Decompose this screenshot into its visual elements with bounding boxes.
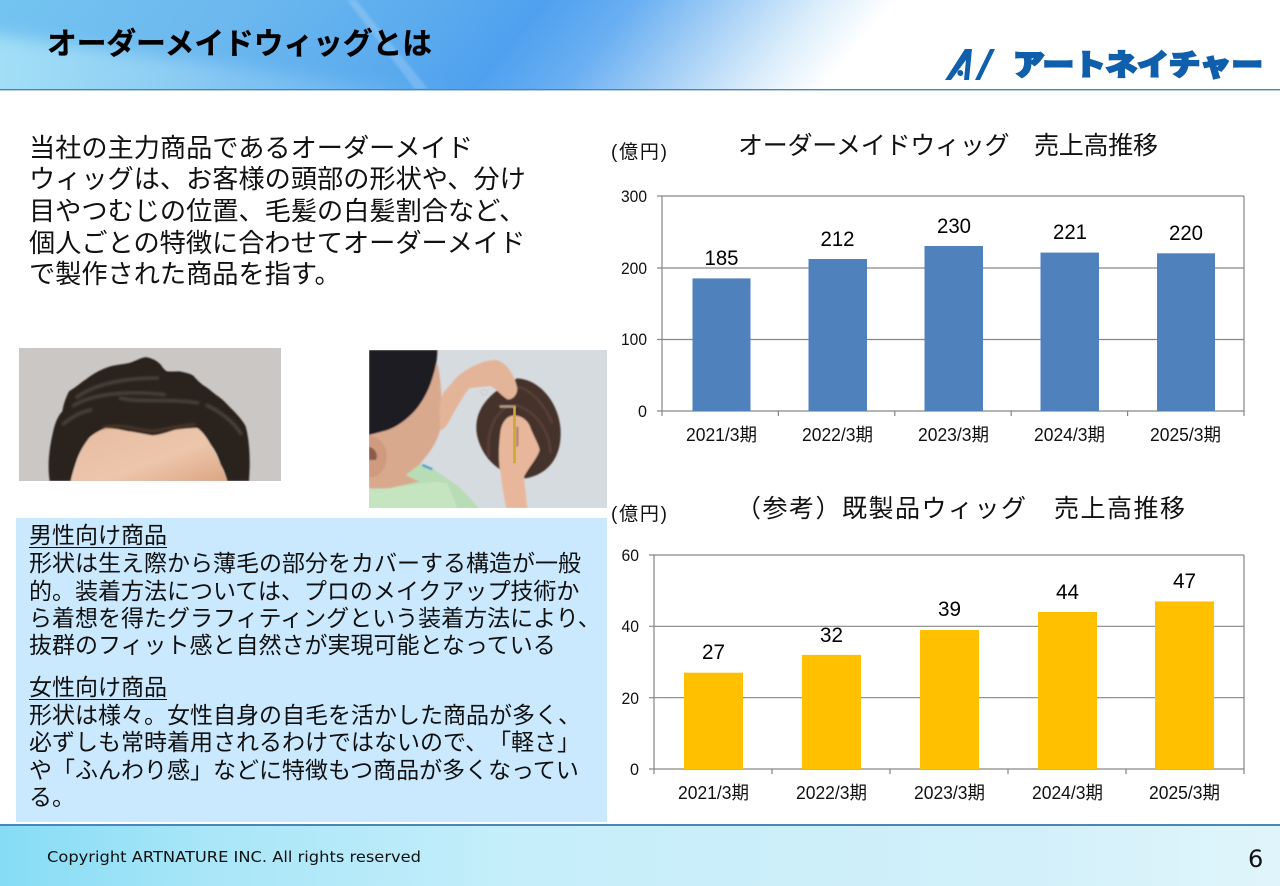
bar chart: ready-made wig sales: 47 xyxy=(1173,570,1196,593)
face and neck xyxy=(369,363,442,488)
bar chart: ready-made wig sales: 40 xyxy=(622,617,639,636)
bar chart: made-to-order wig sales: 2025/3期 xyxy=(1150,425,1221,445)
bar chart: ready-made wig sales: 60 xyxy=(622,546,639,565)
page number: 6 xyxy=(1248,845,1263,873)
text block: men's products: 形状は生え際から薄毛の部分をカバーする構造が一般 xyxy=(29,550,581,576)
heading: women's products: 女性向け商品 xyxy=(29,674,167,700)
bar chart: ready-made wig sales: 27 xyxy=(702,641,725,664)
unit label: (億円) xyxy=(611,141,667,163)
text block: women's products: 形状は様々。女性自身の自毛を活かした商品が多く、 xyxy=(29,702,581,728)
header band xyxy=(0,0,1280,90)
bar chart: made-to-order wig sales: 221 xyxy=(1053,221,1087,244)
text block: women's products: 必ずしも常時着用されるわけではないので、「軽さ」 xyxy=(29,729,580,755)
intro text: 個人ごとの特徴に合わせてオーダーメイド xyxy=(29,228,525,258)
panel: product descriptions xyxy=(16,518,607,822)
bar chart: made-to-order wig sales: 2021/3期 xyxy=(686,425,757,445)
chart title: made-to-order: オーダーメイドウィッグ 売上高推移 xyxy=(738,132,1158,160)
logo mark xyxy=(945,49,995,80)
footer band xyxy=(0,824,1280,886)
shirt xyxy=(369,463,479,508)
text block: women's products xyxy=(29,702,581,810)
pencil xyxy=(513,407,516,463)
bar chart: made-to-order wig sales: 2022/3期 xyxy=(802,425,873,445)
bar chart: ready-made wig sales: 0 xyxy=(630,760,639,779)
bar chart: ready-made wig sales: 2024/3期 xyxy=(1032,783,1103,803)
wig head xyxy=(476,378,561,478)
intro text: 目やつむじの位置、毛髪の白髪割合など、 xyxy=(29,196,525,226)
intro text: ウィッグは、お客様の頭部の形状や、分け xyxy=(29,164,526,194)
photo: fitting a wig xyxy=(369,350,607,508)
bar chart: made-to-order wig sales: 100 xyxy=(621,330,647,349)
bar chart: made-to-order wig sales: 2023/3期 xyxy=(918,425,989,445)
logo: Artnature xyxy=(943,47,1268,83)
text block: women's products: や「ふんわり感」などに特徴もつ商品が多くなってい xyxy=(29,757,579,783)
text block: women's products: る。 xyxy=(29,784,75,810)
text block: men's products: ら着想を得たグラフィティングという装着方法により、 xyxy=(29,605,601,631)
chart title: ready-made: （参考）既製品ウィッグ 売上高推移 xyxy=(736,495,1185,523)
intro text xyxy=(29,133,526,289)
bar chart: ready-made wig sales xyxy=(622,546,1244,803)
copyright: Copyright ARTNATURE INC. All rights reserved xyxy=(47,848,421,866)
bar chart: ready-made wig sales: 2022/3期 xyxy=(796,783,867,803)
intro text: 当社の主力商品であるオーダーメイド xyxy=(29,133,473,163)
bar chart: made-to-order wig sales: 212 xyxy=(820,228,854,251)
upper arm and hand xyxy=(440,360,517,430)
bar chart: made-to-order wig sales: 230 xyxy=(937,215,971,238)
hair highlights xyxy=(62,378,242,435)
bar chart: made-to-order wig sales: 2024/3期 xyxy=(1034,425,1105,445)
photo: man's hairline xyxy=(19,348,281,481)
bar chart: made-to-order wig sales: 0 xyxy=(638,402,647,421)
bar chart: made-to-order wig sales: 200 xyxy=(621,259,647,278)
heading: men's products: 男性向け商品 xyxy=(29,522,167,548)
intro text: で製作された商品を指す。 xyxy=(29,259,341,289)
bar chart: made-to-order wig sales: 220 xyxy=(1169,222,1203,245)
text block: men's products: 的。装着方法については、プロのメイクアップ技術か xyxy=(29,578,579,604)
text block: men's products xyxy=(29,550,601,658)
bar chart: ready-made wig sales: 44 xyxy=(1056,581,1079,604)
bar chart: ready-made wig sales: 20 xyxy=(622,689,639,708)
dark hair xyxy=(369,350,437,435)
bar chart: ready-made wig sales: 39 xyxy=(938,598,961,621)
bar chart: ready-made wig sales: 32 xyxy=(820,624,843,647)
logo wordmark: アートネイチャー xyxy=(1013,50,1263,82)
bar chart: ready-made wig sales: 2025/3期 xyxy=(1149,783,1220,803)
title: オーダーメイドウィッグとは xyxy=(47,27,432,61)
bar chart: made-to-order wig sales: 185 xyxy=(704,247,738,270)
bar chart: made-to-order wig sales: 300 xyxy=(621,187,647,206)
unit label: (億円) xyxy=(611,503,667,525)
bar chart: made-to-order wig sales xyxy=(621,187,1244,445)
text block: men's products: 抜群のフィット感と自然さが実現可能となっている xyxy=(29,632,556,658)
bar chart: ready-made wig sales: 2023/3期 xyxy=(914,783,985,803)
lower arm and hand xyxy=(499,415,540,508)
bar chart: ready-made wig sales: 2021/3期 xyxy=(678,783,749,803)
